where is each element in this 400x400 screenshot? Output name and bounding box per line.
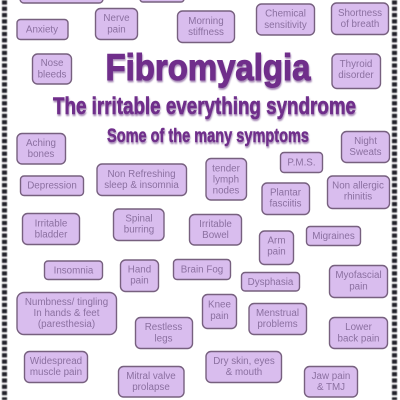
- box: Spinal burning: Spinal: [125, 214, 153, 224]
- box: Irritable Bowel: [190, 214, 242, 245]
- box: Knee pain: Knee: [208, 300, 231, 310]
- box: P.M.S.: P.M.S.: [287, 158, 316, 168]
- box: Aching bones: Aching: [26, 138, 56, 149]
- box: Hand pain: [120, 260, 158, 292]
- box: Menstrual problems: problems: [257, 319, 298, 330]
- box: Spinal burning: [114, 209, 164, 240]
- cropped box top left: [20, 0, 103, 3]
- box: Irritable Bowel: Bowel: [202, 230, 229, 241]
- box: Chemical sensitivity: Chemical: [265, 8, 306, 20]
- box: Knee pain: pain: [210, 311, 229, 322]
- box: Depression: [20, 176, 84, 196]
- box: Migraines: [306, 226, 360, 246]
- box: Numbness / tingling: [17, 292, 116, 334]
- box: Brain Fog: [174, 260, 230, 280]
- box: Nerve pain: Nerve: [103, 13, 130, 24]
- box: Nose bleeds: [32, 54, 72, 84]
- box: Nerve pain: pain: [107, 24, 126, 36]
- box: Mitral valve prolapse: Mitral valve: [126, 371, 176, 382]
- box: Anxiety: Anxiety: [26, 24, 58, 36]
- box: Chemical sensitivity: [256, 4, 314, 35]
- title: Fibromyalgia: [106, 47, 311, 88]
- box: Thyroid disorder: Thyroid: [340, 59, 372, 70]
- box: Hand pain: Hand: [128, 264, 151, 276]
- box: tender lymph nodes: tender: [212, 164, 241, 174]
- subheading: Some of the many symptoms: [107, 125, 309, 147]
- box: Irritable bladder: Irritable: [35, 218, 68, 230]
- box: Thyroid disorder: disorder: [338, 70, 374, 81]
- box: Depression: Depression: [27, 180, 77, 192]
- box: Myofascial pain: Myofascial: [335, 270, 382, 281]
- box: Non Refreshing sleep and insomnia: sleep & insomnia: [104, 180, 179, 191]
- box: Jaw pain and TMJ: Jaw pain: [312, 371, 350, 382]
- box: Plantar fasciitis: fasciitis: [269, 198, 302, 210]
- box: tender lymph nodes: lymph: [213, 174, 239, 186]
- box: Insomnia: [44, 261, 102, 280]
- box: Night Sweats: Night: [354, 136, 377, 147]
- box: Aching bones: [17, 134, 66, 164]
- box: Dry skin, eyes and mouth: [206, 352, 282, 382]
- box: Arm pain: [260, 231, 294, 264]
- box: Morning stiffness: stiffness: [188, 27, 224, 38]
- box: Hand pain: pain: [130, 276, 149, 286]
- box: Widespread muscle pain: muscle pain: [30, 367, 82, 378]
- cropped box top centre: [140, 0, 184, 2]
- box: Numbness / tingling: Numbness/ tingling: [25, 297, 108, 308]
- box: tender lymph nodes: nodes: [213, 186, 239, 196]
- box: Non allergic rhinitis: [328, 176, 390, 208]
- box: Myofascial pain: [330, 266, 388, 298]
- box: Spinal burning: burring: [124, 224, 154, 236]
- box: Dysphasia: Dysphasia: [248, 277, 294, 288]
- box: Plantar fasciitis: [262, 183, 310, 214]
- box: Numbness / tingling: In hands & feet: [34, 308, 100, 319]
- box: Irritable bladder: bladder: [35, 230, 68, 240]
- box: Jaw pain and TMJ: [304, 366, 358, 397]
- box: Nerve pain: [96, 8, 138, 40]
- box: Thyroid disorder: [332, 54, 380, 88]
- box: Menstrual problems: Menstrual: [256, 308, 299, 319]
- right spiral binding: [392, 0, 397, 400]
- box: Dry skin, eyes and mouth: & mouth: [226, 367, 262, 378]
- box: Lower back pain: [330, 318, 388, 348]
- box: Jaw pain and TMJ: & TMJ: [317, 382, 345, 393]
- box: Irritable bladder: [22, 214, 80, 244]
- box: Night Sweats: [342, 132, 390, 162]
- box: Brain Fog: Brain Fog: [181, 264, 223, 276]
- box: Non Refreshing sleep and insomnia: Non Refreshing: [107, 169, 176, 180]
- box: Restless legs: Restless: [145, 322, 182, 333]
- box: Shortness of breath: Shortness: [338, 8, 382, 19]
- box: Lower back pain: back pain: [338, 334, 379, 344]
- box: Irritable Bowel: Irritable: [199, 219, 232, 230]
- box: Aching bones: bones: [28, 149, 54, 160]
- box: Non Refreshing sleep and insomnia: [97, 164, 186, 196]
- box: Non allergic rhinitis: rhinitis: [344, 192, 372, 202]
- box: Lower back pain: Lower: [345, 322, 373, 333]
- box: Chemical sensitivity: sensitivity: [264, 20, 307, 31]
- box: Dry skin, eyes and mouth: Dry skin, eyes: [213, 356, 275, 367]
- box: Restless legs: legs: [155, 334, 173, 344]
- box: Nose bleeds: bleeds: [38, 70, 67, 80]
- box: Morning stiffness: Morning: [188, 16, 224, 27]
- box: Mitral valve prolapse: [118, 366, 184, 397]
- box: Migraines: Migraines: [312, 231, 355, 242]
- box: Widespread muscle pain: Widespread: [30, 356, 82, 367]
- box: tender lymph nodes: [206, 158, 246, 200]
- box: Anxiety: [17, 20, 68, 40]
- box: Morning stiffness: [178, 11, 234, 42]
- box: Shortness of breath: of breath: [341, 19, 379, 30]
- box: Insomnia: Insomnia: [54, 266, 94, 276]
- box: Numbness / tingling: (paresthesia): [38, 319, 95, 330]
- box: P.M.S.: [280, 152, 322, 172]
- box: Plantar fasciitis: Plantar: [270, 188, 302, 198]
- box: Widespread muscle pain: [24, 352, 88, 382]
- box: Arm pain: Arm: [268, 236, 285, 246]
- box: Restless legs: [136, 318, 192, 348]
- left spiral binding: [2, 0, 7, 400]
- box: Non allergic rhinitis: Non allergic: [332, 180, 384, 192]
- box: Arm pain: pain: [267, 246, 286, 258]
- box: Night Sweats: Sweats: [349, 147, 382, 158]
- box: Nose bleeds: Nose: [41, 58, 64, 69]
- box: Knee pain: [202, 294, 236, 328]
- box: Dysphasia: [242, 272, 300, 291]
- box: Shortness of breath: [332, 3, 388, 34]
- box: Myofascial pain: pain: [349, 282, 368, 292]
- box: Menstrual problems: [249, 304, 306, 334]
- box: Mitral valve prolapse: prolapse: [132, 382, 170, 393]
